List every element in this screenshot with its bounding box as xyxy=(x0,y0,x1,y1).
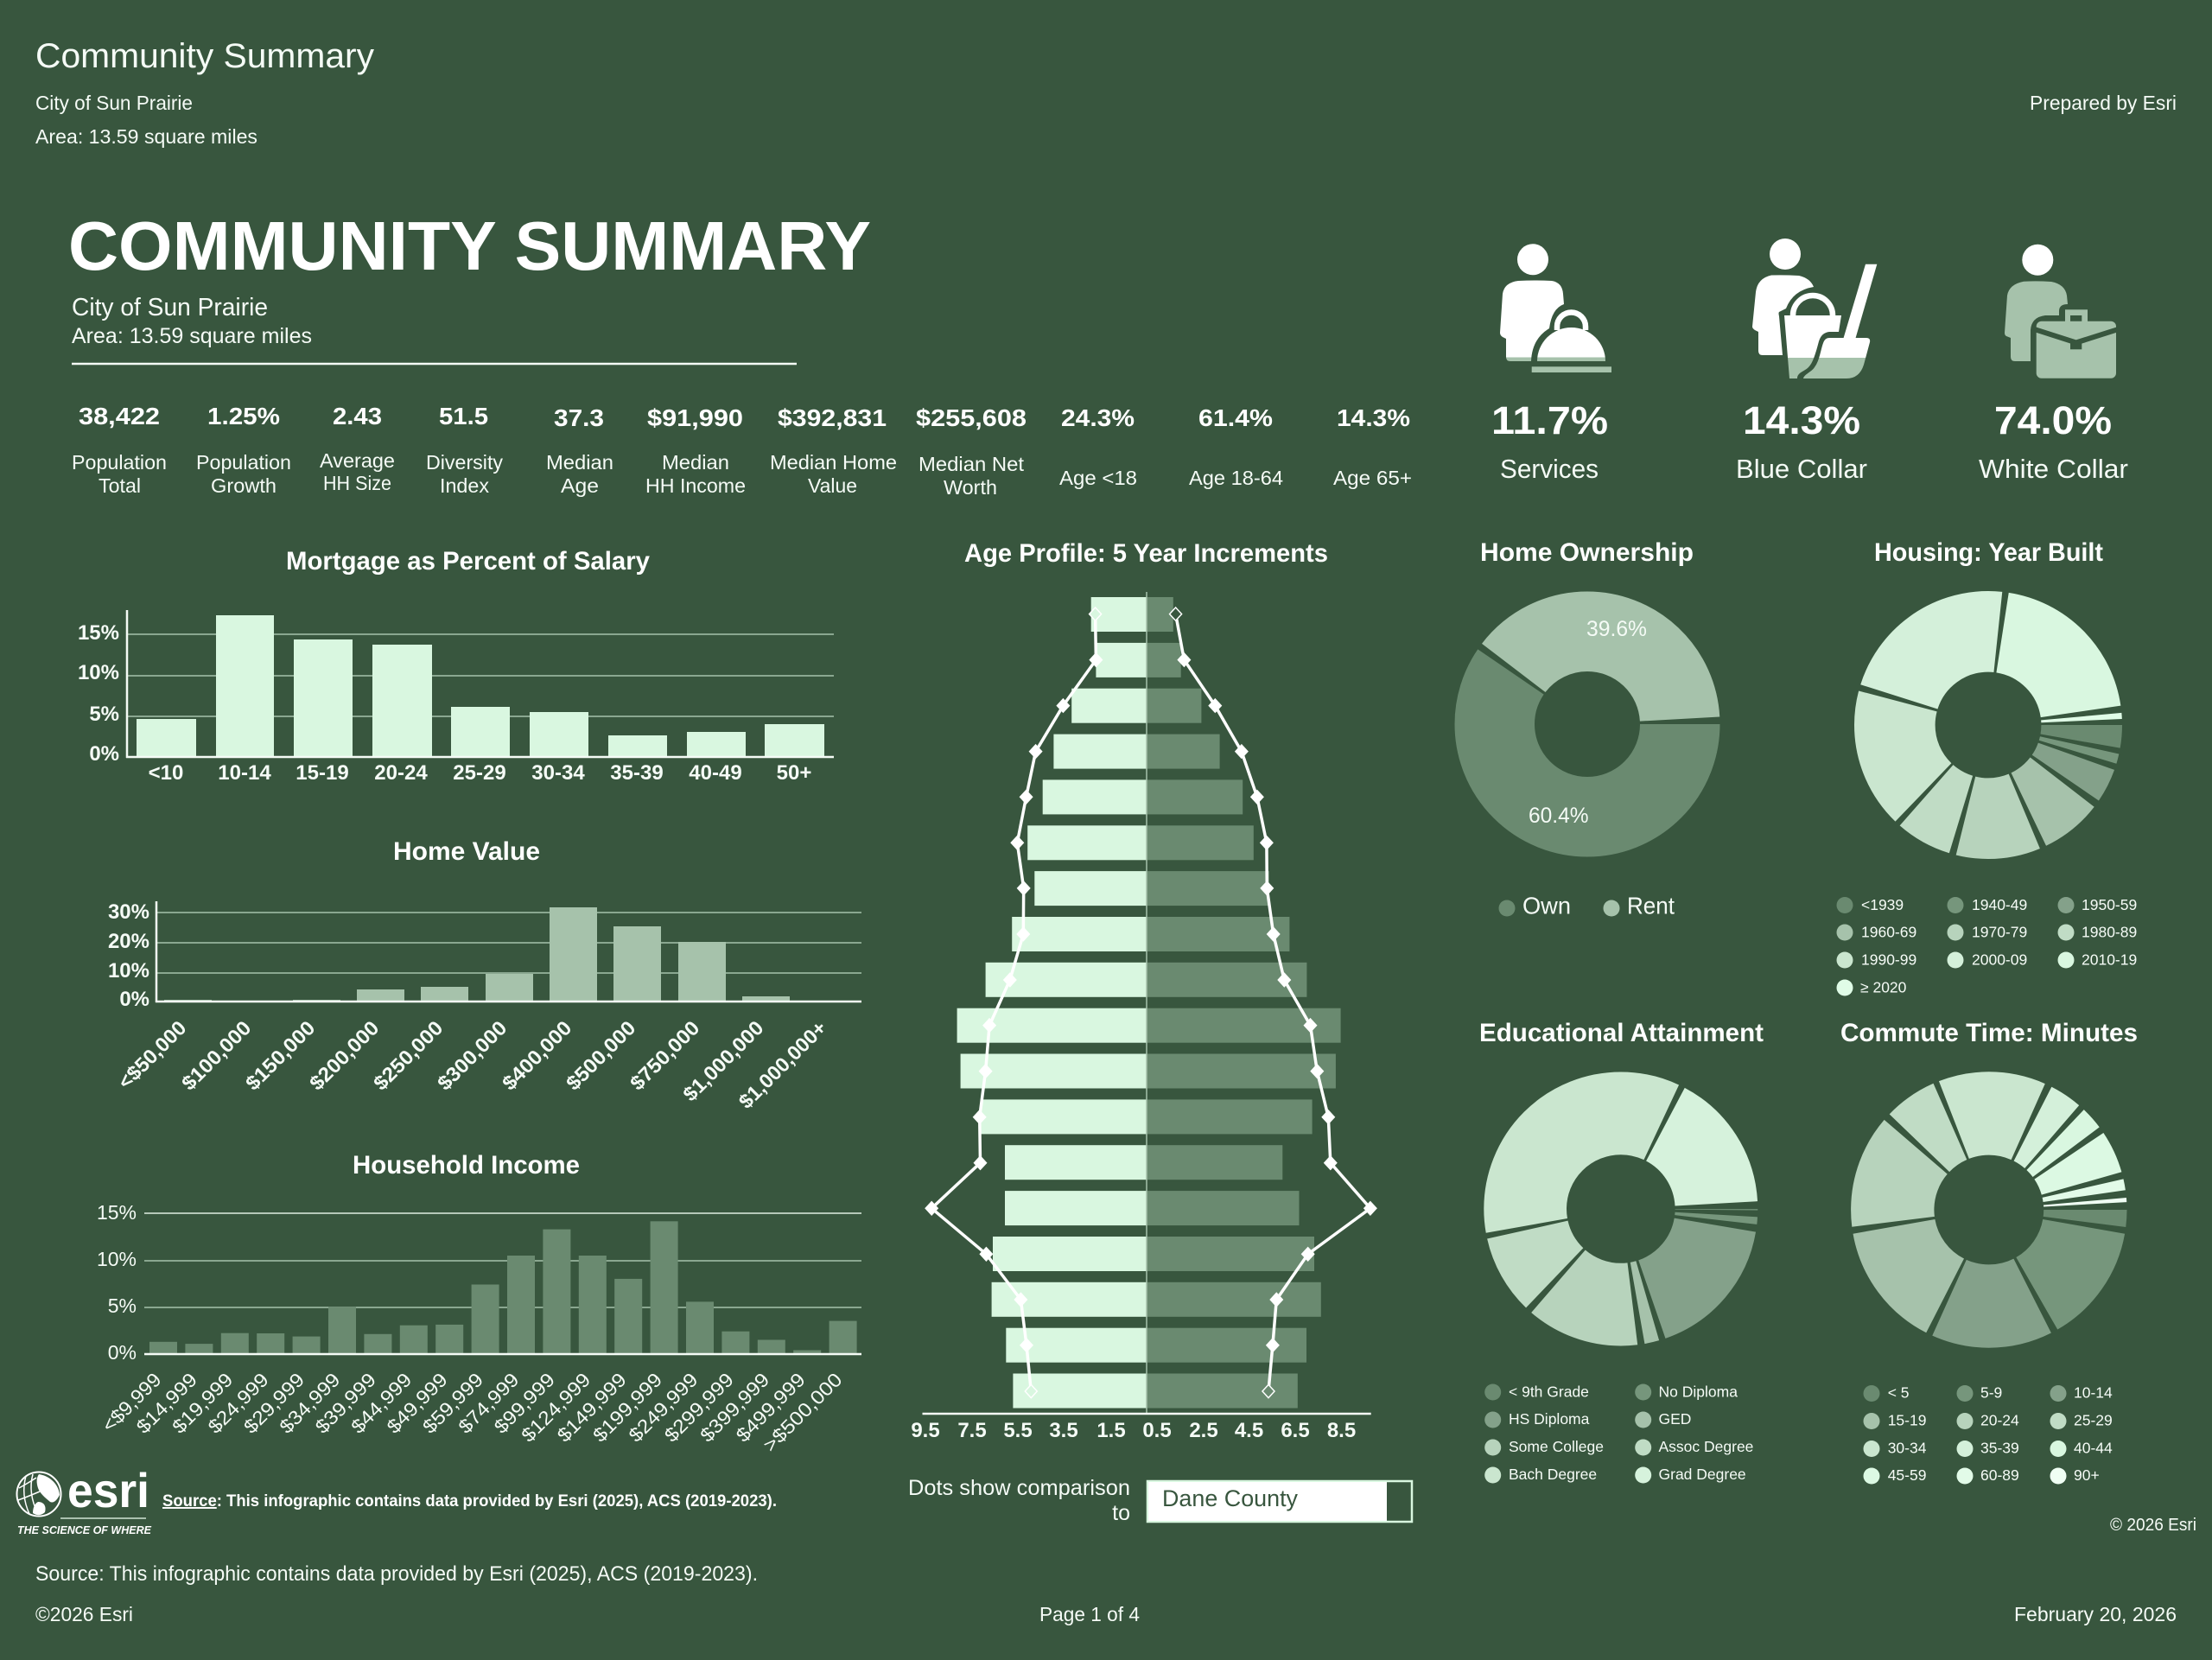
legend: ≥ 2020 xyxy=(1860,978,1907,995)
legend xyxy=(1863,1384,2113,1485)
legend: HS Diploma xyxy=(1509,1410,1590,1428)
legend: GED xyxy=(1659,1410,1691,1428)
stat: diversity index: Index xyxy=(440,474,490,497)
legend xyxy=(1498,892,1675,919)
bar chart xyxy=(137,615,824,757)
comparison line left xyxy=(925,607,1102,1398)
stat: age under 18 xyxy=(1059,404,1137,489)
data label own: 60.4% xyxy=(1529,804,1588,828)
stat: age 18 to 64 xyxy=(1189,404,1283,489)
stat: median net worth: Worth xyxy=(944,476,997,499)
main heading block xyxy=(68,207,871,364)
heading: Home Value xyxy=(393,837,540,866)
panel: mortgage as percent of salary xyxy=(78,547,834,785)
icon: worker with bucket and broom xyxy=(1752,239,1877,378)
x axis labels: $49,999 xyxy=(383,1369,452,1438)
x axis labels: <10 xyxy=(149,761,183,785)
legend: 1940-49 xyxy=(1972,896,2027,913)
stat: diversity index: Diversity xyxy=(426,451,504,474)
comparison label: to xyxy=(1112,1501,1130,1525)
x axis labels: $400,000 xyxy=(498,1016,576,1095)
stat: household size: Average xyxy=(320,449,395,472)
x axis labels: <$50,000 xyxy=(113,1016,191,1093)
stat: household size: 2.43 xyxy=(333,403,382,429)
heading: Age Profile: 5 Year Increments xyxy=(964,539,1328,568)
x axis labels: $24,999 xyxy=(204,1369,273,1438)
age axis labels: 7.5 xyxy=(957,1419,987,1442)
x axis labels: $59,999 xyxy=(418,1369,487,1438)
date: February 20, 2026 xyxy=(2014,1603,2177,1625)
x axis labels xyxy=(98,1369,847,1456)
donut chart xyxy=(1895,632,2082,818)
icon: worker with briefcase xyxy=(2005,245,2118,378)
header location: City of Sun Prairie xyxy=(35,92,193,114)
legend: 1960-69 xyxy=(1861,923,1916,940)
panel: occupation white collar xyxy=(1979,245,2128,484)
x axis labels: $34,999 xyxy=(276,1369,345,1438)
x axis labels: $124,999 xyxy=(518,1369,594,1447)
page header xyxy=(35,37,2177,148)
panel: household income xyxy=(97,1151,861,1456)
legend: 20-24 xyxy=(1980,1412,2019,1429)
stat: age 18 to 64: 61.4% xyxy=(1198,404,1273,431)
source note bold: Source: This infographic contains data provided by Esri (2025), ACS (2019-2023). xyxy=(162,1491,777,1511)
y axis labels: 0% xyxy=(108,1341,137,1364)
stat: age under 18: Age <18 xyxy=(1059,467,1137,489)
stat: median home value xyxy=(770,404,897,497)
legend: < 5 xyxy=(1888,1384,1910,1402)
page number: Page 1 of 4 xyxy=(1039,1603,1140,1625)
legend: Rent xyxy=(1627,892,1675,919)
esri wordmark: esri xyxy=(67,1463,149,1517)
stat: population growth xyxy=(196,403,291,497)
legend: 5-9 xyxy=(1980,1384,2002,1402)
key statistics row xyxy=(72,403,1412,499)
panel: educational attainment xyxy=(1479,1019,1764,1483)
stat: age under 18: 24.3% xyxy=(1061,404,1135,431)
tagline: THE SCIENCE OF WHERE xyxy=(17,1523,151,1536)
legend: Bach Degree xyxy=(1509,1466,1597,1483)
blue collar label: Blue Collar xyxy=(1736,454,1867,484)
donut chart xyxy=(1495,632,1680,817)
x axis labels xyxy=(113,1016,831,1113)
x axis labels: $74,999 xyxy=(454,1369,524,1438)
age axis labels: 1.5 xyxy=(1096,1419,1126,1442)
legend: No Diploma xyxy=(1659,1383,1738,1400)
donut chart xyxy=(1525,1113,1716,1305)
panel: home ownership xyxy=(1480,538,1694,919)
x axis labels: $199,999 xyxy=(588,1369,666,1447)
stat: diversity index xyxy=(426,403,504,497)
legend: Grad Degree xyxy=(1659,1466,1746,1483)
stat: population total: 38,422 xyxy=(79,403,160,429)
age axis labels: 0.5 xyxy=(1142,1419,1172,1442)
dropdown: Dane County xyxy=(1147,1481,1412,1522)
x axis labels xyxy=(149,761,811,785)
stat: population growth: Population xyxy=(196,451,291,474)
x axis labels: $399,999 xyxy=(696,1369,773,1447)
legend: 60-89 xyxy=(1980,1466,2019,1484)
legend xyxy=(1484,1383,1753,1483)
age axis labels: 6.5 xyxy=(1281,1419,1310,1442)
heading: Household Income xyxy=(353,1151,580,1180)
y axis labels: 5% xyxy=(89,703,119,726)
x axis labels: $300,000 xyxy=(433,1016,512,1095)
x axis labels: 15-19 xyxy=(296,761,349,785)
left population bars xyxy=(957,597,1147,1409)
y axis labels: 0% xyxy=(89,742,119,766)
legend xyxy=(1837,896,2137,995)
x axis labels: $100,000 xyxy=(177,1016,256,1095)
stat: population growth: Growth xyxy=(211,474,276,497)
source note: Source: This infographic contains data provided by Esri (2025), ACS (2019-2023). xyxy=(35,1562,758,1586)
area text: Area: 13.59 square miles xyxy=(72,324,312,348)
x axis labels: <$9,999 xyxy=(98,1369,166,1436)
panel: age profile xyxy=(908,539,1412,1525)
x axis labels: $39,999 xyxy=(311,1369,380,1438)
x axis labels: 35-39 xyxy=(610,761,664,785)
legend: 40-44 xyxy=(2074,1440,2113,1457)
white collar label: White Collar xyxy=(1979,454,2128,484)
legend: 2010-19 xyxy=(2082,951,2137,968)
legend: Assoc Degree xyxy=(1659,1438,1753,1455)
stat: age 18 to 64: Age 18-64 xyxy=(1189,467,1283,489)
x axis labels: $750,000 xyxy=(626,1016,704,1095)
y axis labels xyxy=(108,900,149,1011)
x axis labels: 10-14 xyxy=(218,761,271,785)
icon: services worker with cloche xyxy=(1500,244,1611,372)
stat: median age xyxy=(546,404,613,497)
y axis labels xyxy=(78,621,119,766)
right population bars xyxy=(1147,597,1341,1409)
heading: Mortgage as Percent of Salary xyxy=(286,547,650,576)
legend: 45-59 xyxy=(1888,1466,1926,1484)
prepared by: Prepared by Esri xyxy=(2030,92,2177,114)
stat: median home value: Median Home xyxy=(770,451,897,474)
x axis labels: $150,000 xyxy=(241,1016,320,1095)
header title: Community Summary xyxy=(35,37,374,75)
main title: COMMUNITY SUMMARY xyxy=(68,207,871,284)
bar chart xyxy=(149,1221,857,1354)
x axis labels: 30-34 xyxy=(531,761,585,785)
heading: Educational Attainment xyxy=(1479,1019,1764,1047)
y axis labels xyxy=(97,1201,137,1364)
x axis labels: $19,999 xyxy=(168,1369,237,1438)
x axis labels: $499,999 xyxy=(732,1369,810,1447)
heading: Housing: Year Built xyxy=(1874,538,2103,567)
age axis labels xyxy=(911,1419,1356,1442)
header area: Area: 13.59 square miles xyxy=(35,125,257,148)
stat: median net worth: $255,608 xyxy=(916,404,1027,431)
y axis labels: 15% xyxy=(78,621,119,645)
stat: median household income: HH Income xyxy=(645,474,746,497)
legend: < 9th Grade xyxy=(1509,1383,1589,1400)
stat: household size: HH Size xyxy=(323,472,391,494)
x axis labels: 20-24 xyxy=(374,761,428,785)
blue collar value: 14.3% xyxy=(1743,398,1860,442)
stat: median net worth: Median Net xyxy=(918,453,1025,475)
legend: Own xyxy=(1522,892,1571,919)
stat: population total: Population xyxy=(72,451,167,474)
legend: 35-39 xyxy=(1980,1440,2019,1457)
y axis labels: 15% xyxy=(97,1201,137,1224)
stat: median net worth xyxy=(916,404,1027,499)
legend: 1980-89 xyxy=(2082,923,2137,940)
legend: 1970-79 xyxy=(1972,923,2027,940)
legend: 1950-59 xyxy=(2082,896,2137,913)
stat: median age: 37.3 xyxy=(554,404,604,431)
stat: median age: Age xyxy=(561,474,599,497)
age axis labels: 3.5 xyxy=(1049,1419,1078,1442)
stat: diversity index: 51.5 xyxy=(439,403,488,429)
x axis labels: >$500,000 xyxy=(759,1369,847,1456)
copyright note: © 2026 Esri xyxy=(2110,1516,2196,1535)
age axis labels: 4.5 xyxy=(1235,1419,1263,1442)
comparison label: Dots show comparison xyxy=(908,1476,1130,1500)
stat: population total: Total xyxy=(99,474,141,497)
y axis labels: 5% xyxy=(108,1294,137,1317)
x axis labels: $200,000 xyxy=(305,1016,384,1095)
heading: Commute Time: Minutes xyxy=(1840,1019,2138,1047)
legend: 90+ xyxy=(2074,1466,2100,1484)
stat: median age: Median xyxy=(546,451,613,474)
panel: commute time xyxy=(1840,1019,2196,1535)
x axis labels: $44,999 xyxy=(346,1369,416,1438)
legend: <1939 xyxy=(1861,896,1904,913)
legend: 2000-09 xyxy=(1972,951,2027,968)
x axis labels: 25-29 xyxy=(453,761,506,785)
y axis labels: 0% xyxy=(119,988,149,1011)
legend: 15-19 xyxy=(1888,1412,1926,1429)
legend: 30-34 xyxy=(1888,1440,1927,1457)
services value: 11.7% xyxy=(1491,398,1608,442)
stat: median home value: Value xyxy=(808,474,857,497)
services label: Services xyxy=(1500,454,1599,484)
x axis labels: $14,999 xyxy=(132,1369,201,1438)
donut chart xyxy=(1892,1113,2085,1307)
x axis labels: $29,999 xyxy=(239,1369,308,1438)
stat: median household income xyxy=(645,404,746,497)
age axis labels: 8.5 xyxy=(1327,1419,1356,1442)
legend: Some College xyxy=(1509,1438,1604,1455)
panel: occupation services xyxy=(1491,244,1611,484)
comparison line right xyxy=(1170,607,1376,1398)
x axis labels: $249,999 xyxy=(625,1369,702,1447)
panel: home value xyxy=(108,837,861,1113)
stat: population growth: 1.25% xyxy=(207,403,280,429)
stat: age 65 plus: 14.3% xyxy=(1337,404,1410,431)
bar chart xyxy=(164,907,790,1002)
footer copyright: ©2026 Esri xyxy=(35,1603,133,1625)
y axis labels: 10% xyxy=(78,661,119,684)
age axis labels: 2.5 xyxy=(1189,1419,1218,1442)
stat: median household income: Median xyxy=(662,451,729,474)
age axis labels: 5.5 xyxy=(1003,1419,1033,1442)
x axis labels: $99,999 xyxy=(490,1369,559,1438)
x axis labels: $1,000,000+ xyxy=(734,1016,831,1113)
stat: population total xyxy=(72,403,167,497)
x axis labels: $500,000 xyxy=(562,1016,640,1095)
legend: 10-14 xyxy=(2074,1384,2113,1402)
x axis labels: 50+ xyxy=(777,761,811,785)
x axis labels: $149,999 xyxy=(553,1369,631,1447)
icon: globe xyxy=(17,1472,60,1516)
legend: 25-29 xyxy=(2074,1412,2113,1429)
stat: age 65 plus xyxy=(1333,404,1412,489)
panel: housing year built xyxy=(1837,538,2137,995)
y axis labels: 10% xyxy=(97,1248,137,1270)
data label rent: 39.6% xyxy=(1586,617,1647,641)
stat: household size xyxy=(320,403,395,494)
page footer xyxy=(35,1562,2177,1625)
panel: occupation blue collar xyxy=(1736,239,1877,484)
x axis labels: $299,999 xyxy=(660,1369,738,1447)
legend: 1990-99 xyxy=(1861,951,1916,968)
stat: median home value: $392,831 xyxy=(778,404,887,431)
esri logo xyxy=(17,1463,151,1536)
y axis labels: 30% xyxy=(108,900,149,924)
x axis labels: $1,000,000 xyxy=(678,1016,768,1105)
age axis labels: 9.5 xyxy=(911,1419,940,1442)
x axis labels: $250,000 xyxy=(369,1016,448,1095)
y axis labels: 10% xyxy=(108,959,149,983)
stat: age 65 plus: Age 65+ xyxy=(1333,467,1412,489)
x axis labels: 40-49 xyxy=(689,761,742,785)
comparison label xyxy=(908,1476,1130,1525)
location name: City of Sun Prairie xyxy=(72,294,268,321)
stat: median household income: $91,990 xyxy=(647,404,743,431)
heading: Home Ownership xyxy=(1480,538,1694,567)
white collar value: 74.0% xyxy=(1994,398,2112,442)
y axis labels: 20% xyxy=(108,930,149,953)
dropdown: Dane County: Dane County xyxy=(1162,1485,1298,1511)
